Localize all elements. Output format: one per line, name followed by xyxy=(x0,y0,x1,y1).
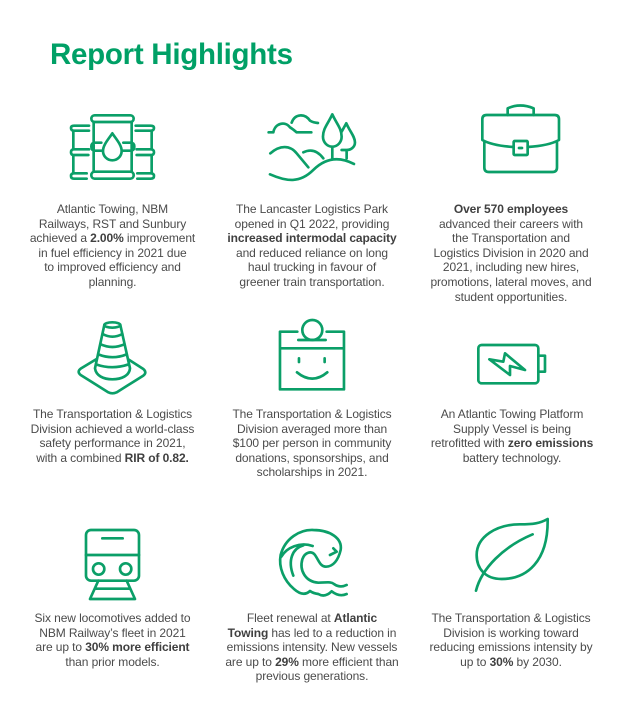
text: Lancaster Logistics Park: greener train transportation. xyxy=(239,275,385,289)
text: community donations: donations, sponsorships, and xyxy=(235,451,389,465)
text: emissions target: Division is working toward xyxy=(443,626,579,640)
text: fleet renewal: are up to 29% more efficient than xyxy=(225,655,399,669)
text: employees: promotions, lateral moves, and xyxy=(430,275,592,289)
text: zero emissions battery: An Atlantic Towing Platform xyxy=(441,407,583,421)
text: Lancaster Logistics Park: haul trucking in favour of xyxy=(248,260,376,274)
text: locomotives: NBM Railway’s fleet in 2021 xyxy=(39,626,186,640)
text: Lancaster Logistics Park: The Lancaster Logistics Park xyxy=(236,202,388,216)
icon: oil barrels xyxy=(71,115,154,179)
text: fuel efficiency: in fuel efficiency in 2021 due xyxy=(38,246,187,260)
icon: traffic cone xyxy=(79,322,145,393)
text: Lancaster Logistics Park: increased intermodal capacity xyxy=(227,231,397,245)
text: fleet renewal: previous generations. xyxy=(256,669,368,683)
text: safety performance xyxy=(31,407,194,465)
text: employees: Logistics Division in 2020 and xyxy=(433,246,589,260)
title: Report Highlights xyxy=(50,38,293,71)
text: locomotives: are up to 30% more efficient xyxy=(36,640,189,654)
text: emissions target: reducing emissions intensity by xyxy=(430,640,592,654)
icon: landscape xyxy=(269,114,355,180)
text: community donations: The Transportation & Logistics xyxy=(232,407,392,421)
text: employees: the Transportation and xyxy=(452,231,570,245)
text: employees: student opportunities. xyxy=(455,290,567,304)
text: emissions target xyxy=(430,611,593,669)
icon: wave xyxy=(280,530,347,595)
text: community donations: scholarships in 2021. xyxy=(257,465,367,479)
text: fleet renewal: Fleet renewal at Atlantic xyxy=(247,611,377,625)
text: community donations: Division averaged more than xyxy=(237,422,387,436)
text: fleet renewal: Towing has led to a reduction in xyxy=(228,626,396,640)
text: locomotives: than prior models. xyxy=(65,655,160,669)
text: zero emissions battery: retrofitted with zero emissions xyxy=(431,436,593,450)
text: zero emissions battery: battery technology. xyxy=(463,451,561,465)
text: safety performance: safety performance in 2021, xyxy=(39,436,186,450)
text: Lancaster Logistics Park: and reduced reliance on long xyxy=(236,246,388,260)
text: fleet renewal: emissions intensity. New vessels xyxy=(227,640,397,654)
text: safety performance: with a combined RIR of 0.82. xyxy=(36,451,189,465)
text: employees: advanced their careers with xyxy=(439,217,583,231)
icon: briefcase xyxy=(482,105,559,172)
text: zero emissions battery: Supply Vessel is being xyxy=(453,422,571,436)
text: fuel efficiency: Railways, RST and Sunbury xyxy=(39,217,186,231)
text: employees: Over 570 employees xyxy=(454,202,568,216)
text: fleet renewal xyxy=(225,611,399,683)
icon: leaf xyxy=(476,519,548,591)
icon: smiling calendar with coin xyxy=(280,320,344,389)
text: zero emissions battery xyxy=(431,407,593,465)
text: Lancaster Logistics Park: opened in Q1 2022, providing xyxy=(235,217,389,231)
icon: battery xyxy=(478,345,545,383)
text: community donations: $100 per person in community xyxy=(233,436,391,450)
text: fuel efficiency: achieved a 2.00% improvement xyxy=(30,231,195,245)
icon: train xyxy=(86,530,139,599)
text: fuel efficiency xyxy=(30,202,196,289)
text: fuel efficiency: planning. xyxy=(89,275,136,289)
text: fuel efficiency: Atlantic Towing, NBM xyxy=(57,202,168,216)
text: Lancaster Logistics Park xyxy=(227,202,397,289)
text: fuel efficiency: to improved efficiency and xyxy=(44,260,181,274)
text: safety performance: Division achieved a world-class xyxy=(31,422,194,436)
text: employees xyxy=(430,202,592,304)
text: employees: 2021, including new hires, xyxy=(443,260,579,274)
text: locomotives xyxy=(35,611,190,669)
text: emissions target: The Transportation & Logistics xyxy=(431,611,591,625)
text: emissions target: up to 30% by 2030. xyxy=(460,655,562,669)
text: safety performance: The Transportation & Logistics xyxy=(33,407,192,421)
text: locomotives: Six new locomotives added to xyxy=(35,611,190,625)
text: community donations xyxy=(232,407,392,479)
